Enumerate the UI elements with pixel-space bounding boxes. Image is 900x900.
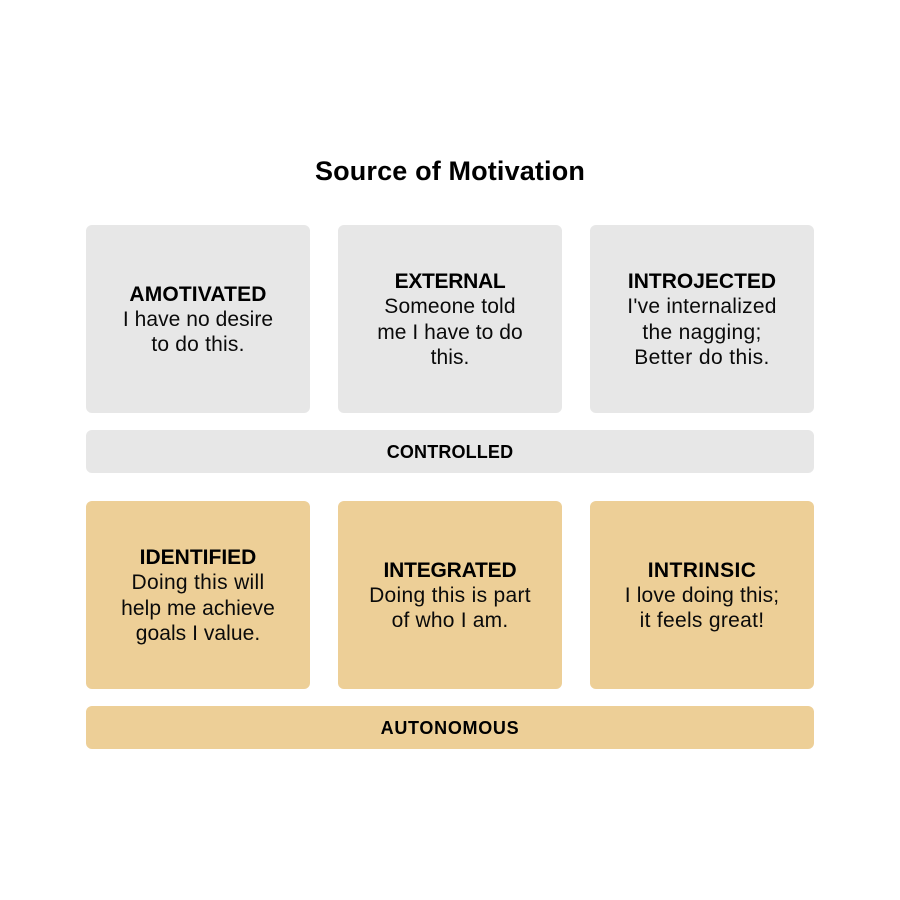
bar: controlled: [86, 430, 814, 473]
panel: integrated: of who I am.: [392, 609, 508, 632]
panel: identified: Doing this will: [132, 571, 264, 594]
panel: external: [338, 225, 562, 413]
panel: introjected: the nagging;: [642, 320, 762, 344]
panel: intrinsic: I love doing this;: [625, 584, 779, 607]
panel: amotivated: to do this.: [151, 333, 245, 356]
panel: integrated: INTEGRATED: [384, 559, 516, 582]
bar: controlled: CONTROLLED: [387, 442, 513, 462]
panel: identified: help me achieve: [121, 596, 275, 620]
panel: introjected: Better do this.: [634, 346, 770, 369]
panel: intrinsic: [590, 501, 814, 689]
panel: introjected: I've internalized: [627, 295, 777, 318]
panel: external: this.: [431, 346, 469, 369]
title: Source of Motivation: [315, 156, 585, 186]
panel: integrated: [338, 501, 562, 689]
panel: introjected: [590, 225, 814, 413]
panel: introjected: INTROJECTED: [628, 270, 776, 293]
panel: integrated: Doing this is part: [369, 584, 531, 607]
panel: amotivated: [86, 225, 310, 413]
panel: identified: [86, 501, 310, 689]
bar: autonomous: AUTONOMOUS: [381, 718, 519, 738]
panel: identified: IDENTIFIED: [140, 546, 256, 569]
panel: intrinsic: it feels great!: [640, 609, 764, 632]
panel: external: Someone told: [384, 295, 516, 318]
panel: amotivated: I have no desire: [123, 308, 273, 331]
panel: identified: goals I value.: [136, 622, 260, 645]
panel: amotivated: AMOTIVATED: [129, 283, 267, 306]
panel: external: me I have to do: [377, 320, 523, 344]
panel: external: EXTERNAL: [395, 270, 505, 293]
panel: intrinsic: INTRINSIC: [648, 559, 756, 582]
bar: autonomous: [86, 706, 814, 749]
